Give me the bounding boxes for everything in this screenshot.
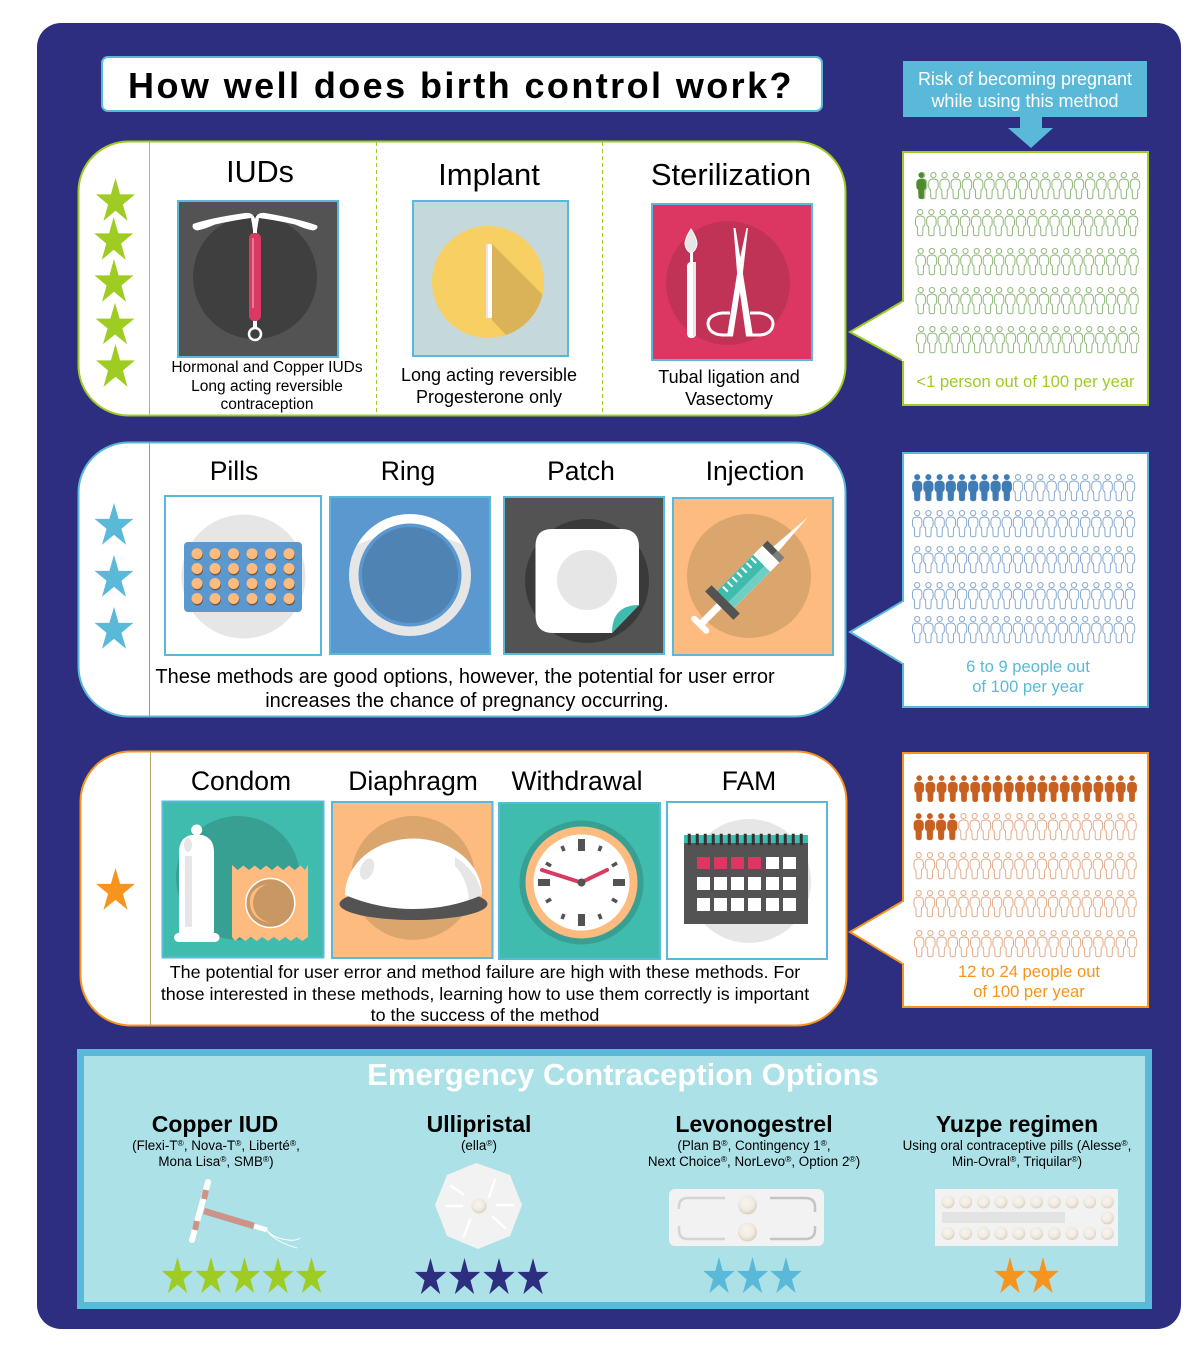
option: levonorgestrel: , Option 2 [791, 1154, 849, 1169]
option: copper IUD: , Nova-T [184, 1138, 235, 1153]
option: levonorgestrel: , Contingency 1 [728, 1138, 821, 1153]
option: copper IUD: ® [263, 1154, 270, 1164]
icon: patch [504, 497, 664, 654]
option: Yuzpe regimen: , [1128, 1138, 1131, 1153]
headings: second tier: Pills [210, 456, 258, 486]
icon: implant [413, 201, 568, 356]
option: ulipristal: (ella [461, 1138, 486, 1153]
option: Yuzpe regimen: ® [1010, 1154, 1017, 1164]
text: second tier note: increases the chance of pregnancy occurring. [265, 690, 669, 712]
callout: risk header: Risk of becoming pregnant [918, 69, 1132, 89]
caption: blue: of 100 per year [972, 677, 1084, 696]
heading: Sterilization: Sterilization [651, 157, 811, 192]
option: copper IUD: Mona Lisa [158, 1154, 220, 1169]
rating: one star [96, 868, 135, 910]
caption: orange [958, 962, 1100, 1001]
option: Yuzpe regimen: Yuzpe regimen [936, 1111, 1098, 1137]
option: copper IUD: ® [220, 1154, 227, 1164]
option: copper IUD [132, 1111, 327, 1293]
heading: emergency contraception: Emergency Contraception Options [367, 1057, 879, 1092]
panel: risk chart 6 to 9 [850, 453, 1148, 707]
text: implant description: Progesterone only [416, 387, 562, 407]
headings: second tier: Injection [706, 456, 804, 486]
panel: least effective methods [80, 752, 846, 1026]
text: IUD description: Long acting reversible [191, 378, 343, 395]
caption: orange: of 100 per year [973, 982, 1085, 1001]
pictogram: blue people [912, 474, 1135, 643]
option: copper IUD: , Liberté [241, 1138, 290, 1153]
icon: ella pill [435, 1163, 522, 1249]
icon: IUD [178, 201, 338, 357]
rating: three stars [95, 503, 133, 649]
option: levonorgestrel: ® [721, 1138, 728, 1148]
caption: blue [966, 657, 1090, 696]
option: copper IUD: ® [235, 1138, 242, 1148]
icon: pill strip [935, 1189, 1118, 1246]
icon: syringe [673, 498, 833, 655]
heading: IUDs: IUDs [226, 155, 294, 189]
option: levonorgestrel: , [827, 1138, 831, 1153]
text: IUD description: Hormonal and Copper IUDs [171, 359, 363, 376]
text: third tier note: The potential for user error and method failure are high with these methods. For [170, 962, 800, 982]
panel: good methods [78, 442, 846, 716]
icon: condom [162, 802, 324, 958]
option: levonorgestrel: Next Choice [648, 1154, 721, 1169]
text: second tier note [155, 666, 775, 712]
option: Yuzpe regimen [903, 1111, 1131, 1293]
option: ulipristal [415, 1111, 549, 1294]
text: third tier note: to the success of the method [371, 1005, 599, 1025]
title: How well does birth control work? [128, 65, 794, 106]
option: ulipristal: Ullipristal [427, 1111, 531, 1137]
pictogram: orange people [914, 776, 1137, 957]
icon: calendar [667, 802, 827, 959]
option: copper IUD: (Flexi-T [132, 1138, 178, 1153]
icon: scalpel and scissors [652, 204, 812, 360]
option: Yuzpe regimen: Min-Ovral [952, 1154, 1010, 1169]
text: sterilization description: Vasectomy [685, 389, 773, 409]
option: copper IUD: Copper IUD [152, 1111, 278, 1137]
option: copper IUD: ® [290, 1138, 297, 1148]
panel: risk chart 12 to 24 [850, 753, 1148, 1007]
rating: five stars [94, 178, 135, 387]
option: copper IUD: ) [269, 1154, 274, 1169]
headings: second tier [210, 456, 804, 486]
caption: blue: 6 to 9 people out [966, 657, 1090, 676]
headings: third tier: Condom [191, 766, 291, 796]
rating: three stars [703, 1257, 802, 1293]
option: Yuzpe regimen: Using oral contraceptive pills (Alesse [903, 1138, 1121, 1153]
icon: ring [330, 497, 490, 654]
option: levonorgestrel: Levonogestrel [675, 1111, 833, 1137]
text: sterilization description: Tubal ligation and [658, 367, 800, 387]
pictogram: green people [916, 172, 1140, 353]
option: levonorgestrel: ) [856, 1154, 860, 1169]
headings: second tier: Patch [547, 456, 615, 486]
callout: risk header [903, 61, 1147, 117]
headings: third tier: FAM [722, 766, 776, 796]
option: Yuzpe regimen: ® [1121, 1138, 1128, 1148]
option: levonorgestrel: ® [821, 1138, 828, 1148]
headings: third tier [191, 766, 776, 796]
option: Yuzpe regimen: , Triquilar [1016, 1154, 1072, 1169]
arrow: risk header down [1008, 117, 1053, 148]
option: ulipristal: ) [493, 1138, 497, 1153]
option: levonorgestrel: ® [849, 1154, 856, 1164]
text: third tier note: those interested in these methods, learning how to use them correctly is important [161, 984, 809, 1004]
option: copper IUD: ® [178, 1138, 185, 1148]
text: implant description: Long acting reversible [401, 365, 577, 385]
option: levonorgestrel [648, 1111, 860, 1293]
headings: third tier: Withdrawal [511, 766, 643, 796]
panel: most effective methods [78, 142, 846, 416]
option: Yuzpe regimen: ) [1078, 1154, 1082, 1169]
text: third tier note [161, 962, 809, 1025]
text: IUD description: contraception [220, 396, 314, 413]
option: copper IUD: , [296, 1138, 300, 1153]
option: copper IUD: , SMB [226, 1154, 263, 1169]
option: levonorgestrel: ® [785, 1154, 792, 1164]
option: Yuzpe regimen: ® [1071, 1154, 1078, 1164]
icon: copper IUD [192, 1182, 300, 1248]
option: levonorgestrel: (Plan B [677, 1138, 721, 1153]
rating: five stars [162, 1257, 327, 1293]
headings: second tier: Ring [381, 456, 435, 486]
heading: Implant: Implant [438, 157, 540, 192]
text: IUD description [171, 359, 363, 413]
rating: two stars [994, 1257, 1059, 1293]
text: sterilization description [658, 367, 800, 409]
caption: green: <1 person out of 100 per year [916, 372, 1135, 391]
option: ulipristal: ® [486, 1138, 493, 1148]
icon: pills [165, 496, 321, 655]
text: implant description [401, 365, 577, 407]
icon: diaphragm [332, 802, 492, 958]
option: levonorgestrel: ® [721, 1154, 728, 1164]
headings: third tier: Diaphragm [348, 766, 478, 796]
icon: clock [499, 803, 660, 959]
rating: four stars [415, 1258, 549, 1294]
panel: risk chart under one percent [850, 152, 1148, 405]
callout: risk header: while using this method [930, 91, 1119, 111]
text: second tier note: These methods are good options, however, the potential for user error [155, 666, 775, 688]
panel: emergency contraception [80, 1052, 1148, 1306]
caption: orange: 12 to 24 people out [958, 962, 1100, 981]
option: levonorgestrel: , NorLevo [727, 1154, 785, 1169]
icon: two-pill blister [669, 1189, 824, 1246]
